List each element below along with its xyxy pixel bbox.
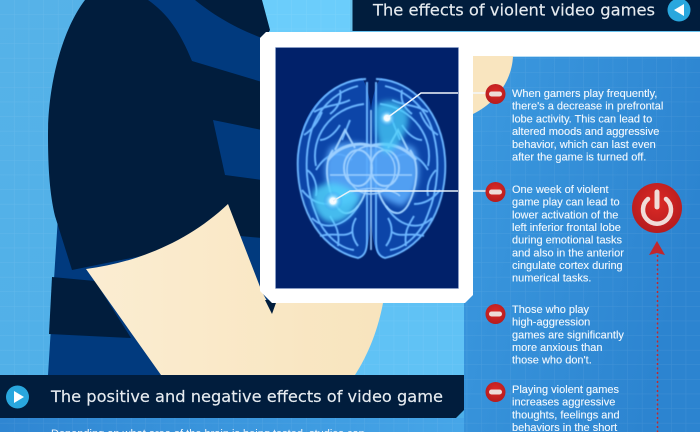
arm: skin behind the panel	[473, 56, 513, 114]
shirt: dark body	[48, 0, 270, 270]
effect 1: prefrontal lobe	[486, 84, 663, 164]
effect 4: aggressive thoughts: thoughts, feelings and	[512, 409, 620, 421]
panel: white band above effects	[460, 31, 700, 57]
effect 2: frontal lobe activation: during emotional tasks	[512, 235, 623, 247]
icon: back arrow	[668, 0, 690, 22]
effect 3: anxiety: games are significantly	[512, 329, 624, 341]
brain: lower glowing area	[312, 183, 360, 223]
effect 1: prefrontal lobe: lobe activity. This can lead to	[512, 113, 652, 125]
header: the positive and negative effects of video game	[0, 375, 464, 418]
arrow: dotted red upward	[649, 241, 665, 432]
arm: cream skin	[86, 204, 383, 375]
effect 3: anxiety	[486, 304, 624, 367]
icon: minus	[486, 382, 506, 402]
effect 4: aggressive thoughts: Playing violent games	[512, 384, 620, 396]
effect 1: prefrontal lobe: there's a decrease in prefrontal	[512, 101, 663, 113]
panel: blue effects background	[464, 56, 700, 432]
shirt: upper stripe	[148, 0, 262, 82]
effect 4: aggressive thoughts	[486, 382, 620, 432]
pointer line: upper	[387, 93, 486, 118]
icon: minus	[486, 84, 506, 104]
effect 2: frontal lobe activation: cingulate cortex during	[512, 260, 623, 272]
effect 1: prefrontal lobe: When gamers play frequently,	[512, 88, 657, 100]
header: the effects of violent video games	[350, 0, 700, 32]
effect 3: anxiety: more anxious than	[512, 342, 602, 354]
highlight: upper spot	[378, 109, 396, 127]
effect 2: frontal lobe activation: One week of violent	[512, 184, 609, 196]
effect 1: prefrontal lobe: altered moods and aggressive	[512, 126, 659, 138]
effect 3: anxiety: Those who play	[512, 304, 590, 316]
effect 2: frontal lobe activation: game play can lead to	[512, 197, 620, 209]
icon: minus	[486, 304, 506, 324]
effect 3: anxiety: those who don't.	[512, 355, 592, 367]
highlight: lower spot	[323, 191, 343, 211]
panel: brain image frame	[260, 32, 486, 303]
effect 1: prefrontal lobe: behavior, which can last even	[512, 139, 656, 151]
shirt: middle stripe	[213, 120, 262, 180]
effect 3: anxiety: high-aggression	[512, 317, 590, 329]
shirt: lower blue area	[48, 216, 280, 375]
brain illustration	[298, 78, 445, 258]
header: the effects of violent video games: The effects of violent video games	[372, 0, 655, 20]
shirt: lower dark stripe	[49, 277, 131, 338]
icon: minus	[486, 182, 506, 202]
effect 2: frontal lobe activation	[486, 182, 624, 285]
illustration: gamer figure with shirt and arm	[48, 0, 513, 375]
effect 4: aggressive thoughts: increases aggressive	[512, 397, 615, 409]
panel: intro text strip	[0, 418, 464, 432]
brain: upper glowing area	[375, 101, 408, 154]
icon: play arrow	[6, 386, 29, 408]
shirt: dark notch	[265, 300, 277, 314]
pointer line: lower	[333, 191, 486, 201]
brain outlines	[298, 79, 367, 258]
effect 2: frontal lobe activation: numerical tasks.	[512, 273, 591, 285]
effect 1: prefrontal lobe: after the game is turned off.	[512, 152, 646, 164]
brain: bright central structure	[325, 142, 419, 206]
header: the positive and negative effects of video game: The positive and negative effects of video game	[50, 387, 443, 406]
icon: red power button	[632, 183, 682, 233]
effect 2: frontal lobe activation: and also in the anterior	[512, 247, 624, 259]
effect 2: frontal lobe activation: left inferior frontal lobe	[512, 222, 621, 234]
effect 2: frontal lobe activation: lower activation of the	[512, 209, 618, 221]
